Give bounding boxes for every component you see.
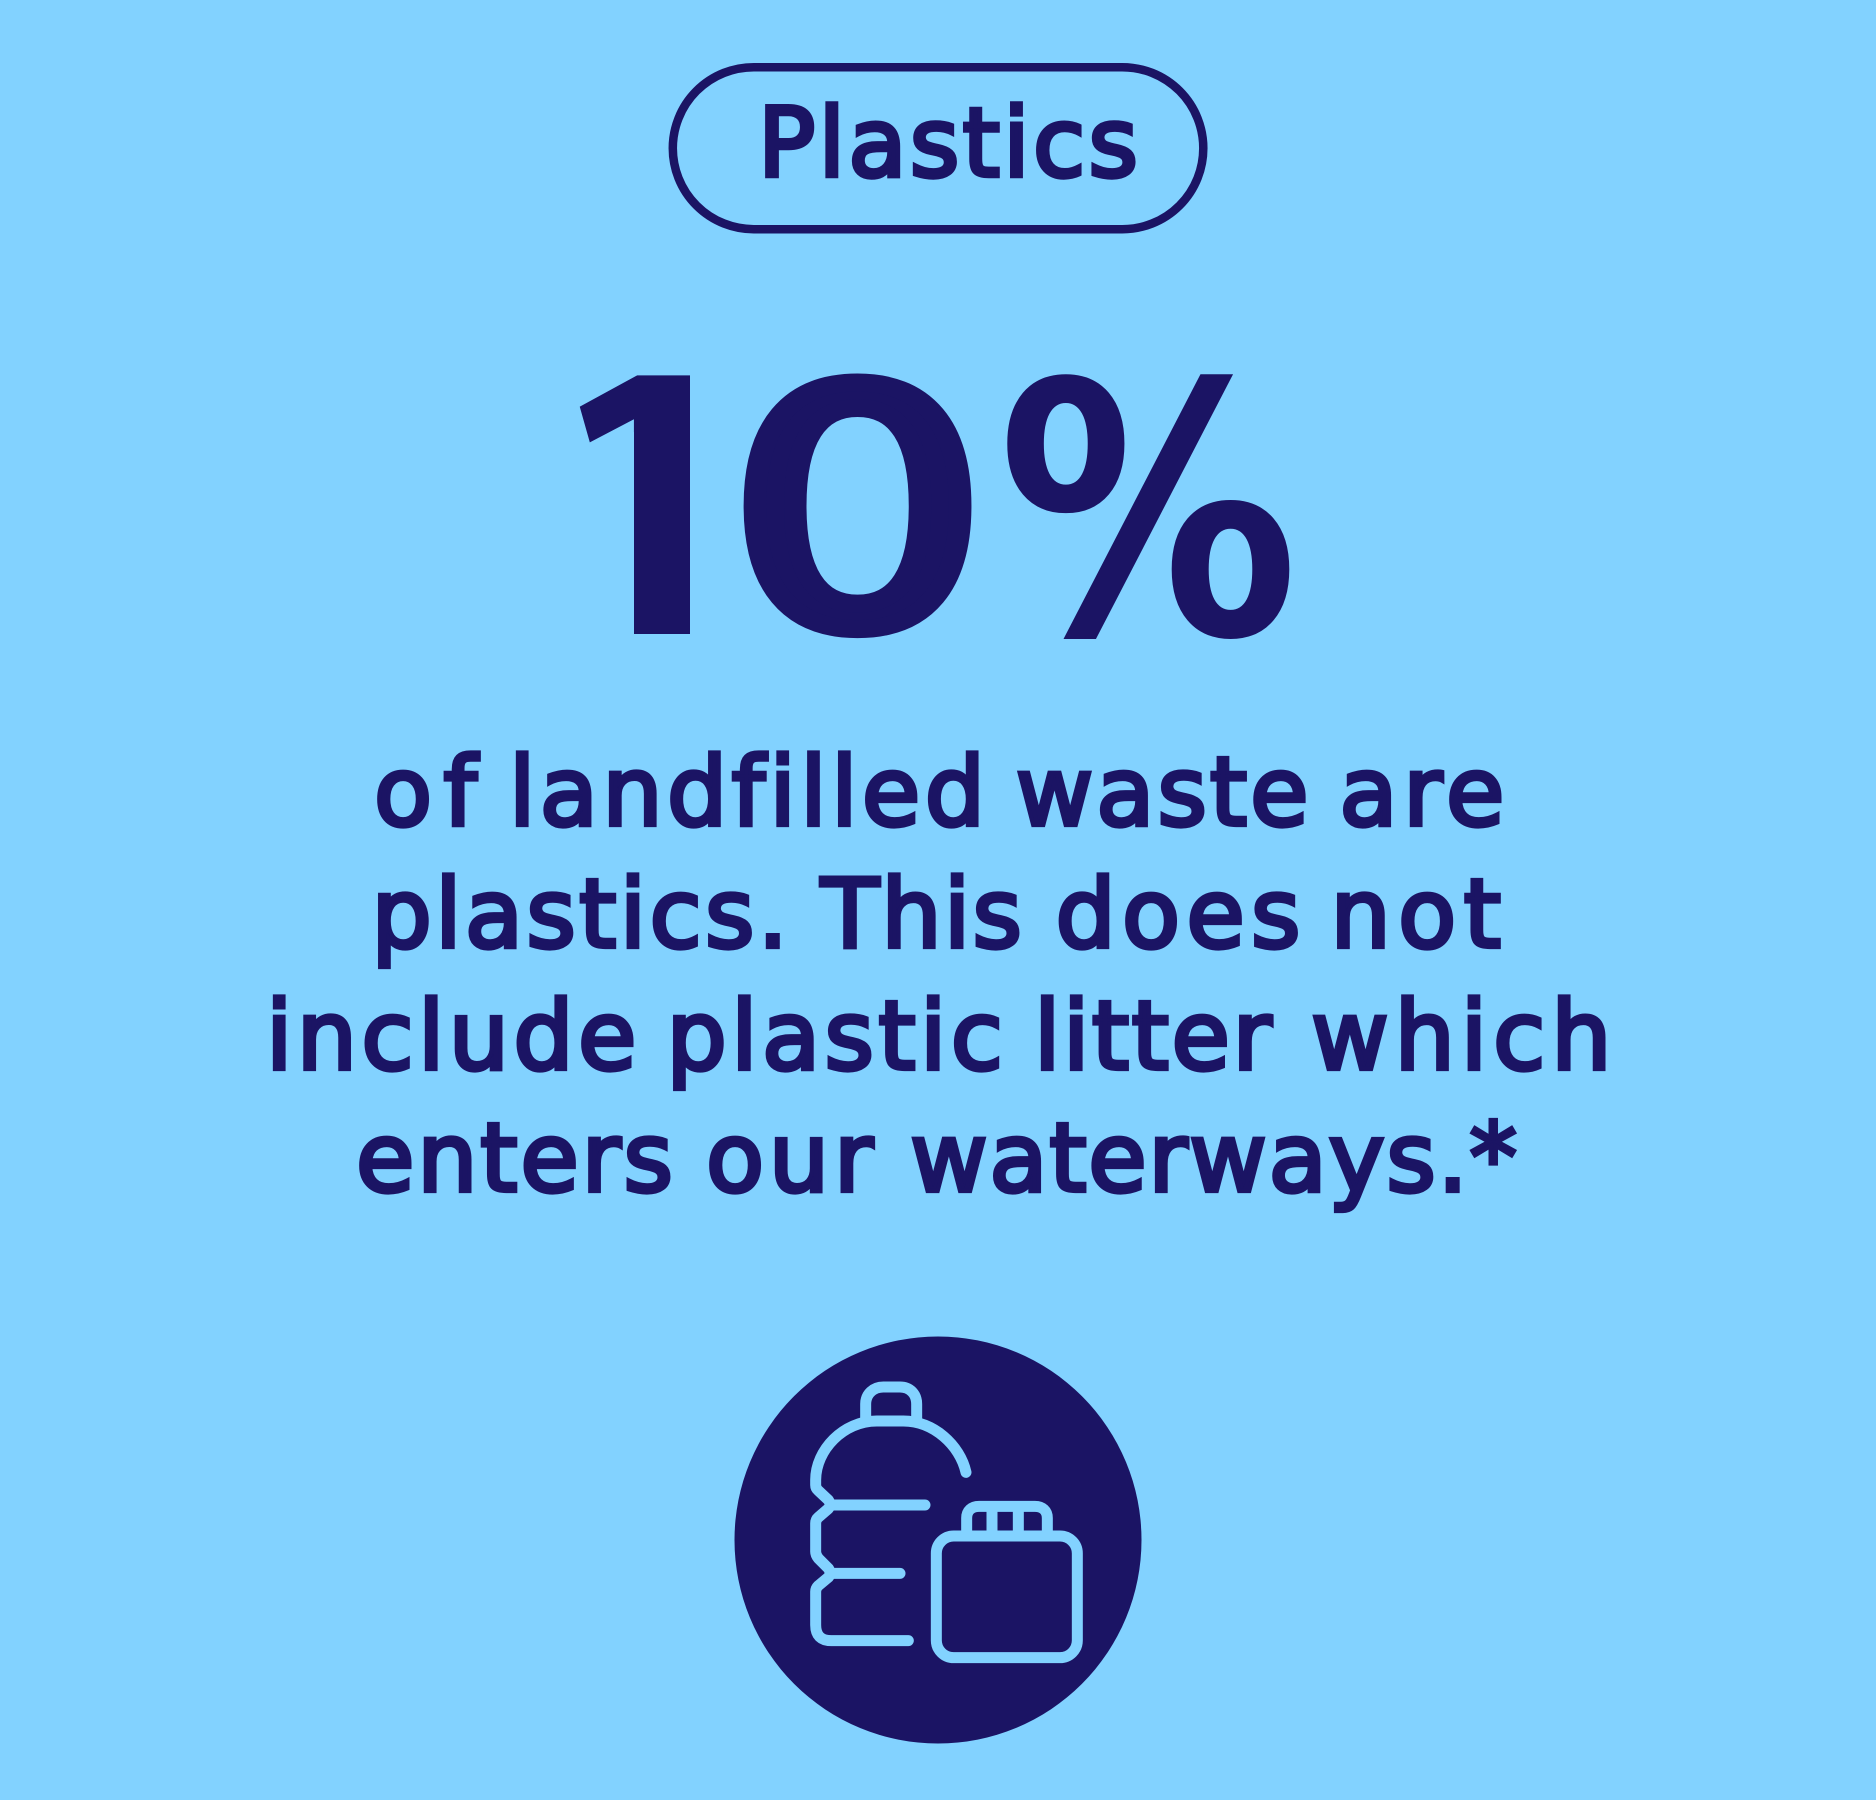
body text: enters <box>356 1104 673 1214</box>
body text: This <box>820 860 1022 970</box>
category pill: Plastics: Plastics <box>758 89 1138 199</box>
big statistic: 10%: % <box>998 309 1299 717</box>
body text: waterways.* <box>910 1104 1517 1214</box>
icon: jar <box>936 1506 1077 1658</box>
body text: plastic <box>666 982 1003 1092</box>
body text: plastics. <box>372 860 788 970</box>
body text: not <box>1330 860 1501 970</box>
icon background circle <box>734 1336 1142 1744</box>
body text: our <box>706 1104 874 1214</box>
body text: landfilled <box>509 738 985 848</box>
big statistic: 10%: 0 <box>728 322 987 702</box>
category pill: Plastics <box>673 67 1203 229</box>
icon: bottle <box>816 1387 966 1641</box>
body text: are <box>1339 738 1504 848</box>
big statistic: 10%: 1 <box>530 294 778 714</box>
big statistic: 10% <box>580 374 1290 639</box>
body text: waste <box>1016 738 1309 848</box>
body text <box>266 738 1612 1214</box>
body text: which <box>1311 982 1612 1092</box>
body text: does <box>1056 860 1300 970</box>
body text: include <box>266 982 636 1092</box>
body text: of <box>374 738 480 848</box>
icon: plastic bottle and jar in circle <box>734 1336 1142 1744</box>
body text: litter <box>1034 982 1272 1092</box>
